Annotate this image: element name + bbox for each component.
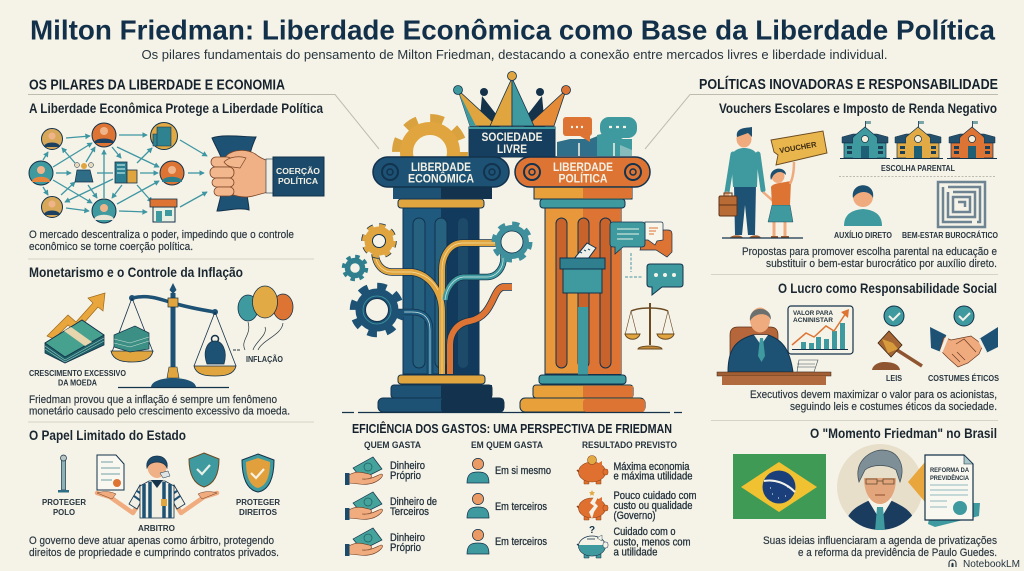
column headers — [364, 440, 677, 451]
panel: eficiência dos gastos — [345, 421, 697, 558]
icon: speech bubbles and crowd — [557, 117, 637, 156]
text block: friedman — [29, 394, 290, 418]
column: resultado previsto: Cuidado com o — [614, 526, 676, 538]
chart board: valor para acionistas — [788, 306, 853, 354]
icon: shield check teal — [189, 453, 219, 487]
text block: suas ideias: Suas ideias influenciaram a agenda de privatizações — [763, 535, 997, 547]
icon: empty piggy bank: ? — [589, 525, 595, 536]
icon: direct aid person — [844, 185, 882, 226]
pillar: liberdade política — [515, 157, 650, 412]
icon: gear teal large — [494, 224, 530, 260]
column: quem gasta: Dinheiro — [390, 532, 425, 544]
column: resultado previsto: Máxima economia — [614, 461, 690, 473]
column headers: EM QUEM GASTA — [471, 440, 543, 451]
icon: hand with money 3 — [345, 528, 382, 556]
column: resultado previsto: custo ou qualidade — [614, 500, 693, 512]
text block: propostas: substituir o bem-estar burocrático por auxílio direto. — [766, 258, 997, 270]
label: liberdade econômica — [408, 162, 474, 186]
label: crescimento excessivo: CRESCIMENTO EXCESSIVO — [29, 368, 126, 378]
text block: propostas — [742, 246, 997, 270]
banner: sociedade livre: LIVRE — [497, 144, 527, 156]
text block: executivos: seguindo leis e costumes éticos da sociedade. — [790, 401, 997, 413]
column: em quem gasta: Em si mesmo — [495, 465, 551, 477]
heading: liberdade econômica: A Liberdade Econômica Protege a Liberdade Política — [29, 101, 323, 116]
banner: sociedade livre: SOCIEDADE — [482, 132, 543, 144]
icon: fist crushing bag — [210, 136, 324, 211]
column: resultado previsto: custo, menos com — [614, 536, 691, 548]
icon: crown — [454, 72, 570, 127]
column: quem gasta: Terceiros — [390, 506, 429, 518]
text block: governo — [29, 535, 279, 559]
panel: políticas inovadoras — [645, 76, 999, 559]
banner: sociedade livre — [469, 127, 555, 157]
icon: meeting group — [74, 162, 94, 182]
column: em quem gasta: Em terceiros — [495, 501, 547, 513]
icon: full piggy bank — [577, 456, 608, 484]
icon: portrait of Paulo Guedes — [837, 444, 923, 531]
ground line — [342, 412, 682, 414]
label: inflação: INFLAÇÃO — [246, 354, 283, 364]
icon: balloons — [233, 286, 293, 350]
label: árbitro: ARBITRO — [138, 523, 175, 533]
watermark: NotebookLM: NotebookLM — [963, 558, 1020, 570]
label: proteger polo — [42, 497, 87, 517]
label: proteger direitos — [236, 497, 281, 517]
labels: leis and costumes éticos — [886, 373, 999, 383]
labels: leis and costumes éticos: COSTUMES ÉTICOS — [928, 373, 999, 383]
label: crescimento excessivo: DA MOEDA — [58, 378, 97, 388]
column headers: RESULTADO PREVISTO — [582, 440, 677, 451]
icon: brazil flag — [733, 454, 826, 519]
label: liberdade política: POLÍTICA — [558, 172, 608, 186]
column: quem gasta: Próprio — [390, 470, 421, 482]
label: proteger direitos: PROTEGER — [236, 497, 281, 507]
label: escolha parental: ESCOLHA PARENTAL — [881, 163, 955, 173]
pillar: liberdade econômica — [373, 157, 509, 412]
label: liberdade econômica: ECONÔMICA — [408, 172, 474, 186]
subtitle: Os pilares fundamentais do pensamento de Milton Friedman, destacando a conexão entre mercados livres e liberdade individual. — [142, 47, 888, 62]
labels: auxílio and bem-estar: AUXÍLIO DIRETO — [834, 230, 892, 240]
heading: papel limitado: O Papel Limitado do Estado — [29, 428, 186, 443]
labels: auxílio and bem-estar: BEM-ESTAR BUROCRÁTICO — [902, 230, 998, 240]
section heading: pilares: OS PILARES DA LIBERDADE E ECONOMIA — [29, 78, 285, 94]
text block: executivos: Executivos devem maximizar o valor para os acionistas, — [750, 389, 997, 401]
icon: fist crushing bag: POLÍTICA — [278, 176, 318, 186]
icon: hand with money 2 — [345, 492, 382, 520]
heading: eficiência: EFICIÊNCIA DOS GASTOS: UMA PERSPECTIVA DE FRIEDMAN — [352, 421, 672, 436]
column: quem gasta: Próprio — [390, 542, 421, 554]
icon: voucher: VOUCHER — [779, 140, 818, 155]
network diagram — [29, 122, 207, 223]
icon: referee — [97, 456, 217, 518]
label: liberdade política: LIBERDADE — [553, 162, 613, 174]
chart board: valor para acionistas: VALOR PARA — [793, 310, 833, 317]
icon: building — [153, 127, 171, 146]
label: liberdade econômica: LIBERDADE — [411, 162, 471, 174]
icon: reforma da previdência document: REFORMA DA — [930, 467, 969, 474]
labels: leis and costumes éticos: LEIS — [886, 373, 902, 383]
text block: friedman: monetário causado pelo crescimento excessivo da moeda. — [29, 406, 290, 418]
icon: rising arrow — [47, 293, 105, 339]
column: resultado previsto: e máxima utilidade — [614, 470, 693, 482]
labels: auxílio and bem-estar — [834, 230, 998, 240]
panel: os pilares da liberdade e economia — [28, 78, 379, 559]
icon: store — [150, 199, 177, 222]
icon: shield check gold — [242, 454, 274, 492]
icon: small scales — [625, 303, 674, 349]
column: resultado previsto: a utilidade — [614, 546, 658, 558]
title: Milton Friedman: Liberdade Econômica como Base da Liberdade Política — [30, 14, 995, 46]
icon: post — [58, 455, 69, 492]
text block: executivos — [750, 389, 997, 413]
node: people — [29, 122, 184, 223]
column: resultado previsto: Pouco cuidado com — [614, 490, 697, 502]
text block: friedman: Friedman provou que a inflação é sempre um fenômeno — [29, 394, 277, 406]
column headers: QUEM GASTA — [364, 440, 421, 451]
column: em quem gasta: Em terceiros — [495, 536, 547, 548]
icon: hand with money — [345, 457, 382, 485]
label: coerção política: COERÇÃO — [276, 166, 320, 176]
chart board: valor para acionistas: ACNINISTAR — [793, 317, 833, 324]
illustration: executive at desk — [717, 308, 831, 385]
icon: ballot box — [560, 243, 605, 293]
text block: mercado: econômico se torne coerção política. — [29, 241, 193, 253]
label: crescimento excessivo — [29, 368, 126, 388]
column: resultado previsto — [577, 456, 697, 558]
panel: central pillars — [342, 72, 683, 412]
heading: momento friedman: O "Momento Friedman" no Brasil — [810, 426, 997, 441]
icon: broken piggy bank — [577, 490, 608, 520]
icons: schools — [840, 121, 997, 158]
text block: mercado: O mercado descentraliza o poder, impedindo que o controle — [29, 229, 294, 241]
label: proteger direitos: DIREITOS — [239, 507, 277, 517]
column: quem gasta: Dinheiro — [390, 460, 425, 472]
icon: gear gold small — [364, 226, 394, 256]
label: proteger polo: PROTEGER — [42, 497, 87, 507]
icon: maze — [938, 182, 985, 227]
column: em quem gasta — [467, 458, 551, 554]
icon: reforma da previdência document — [908, 455, 980, 527]
text block: suas ideias — [763, 535, 997, 559]
illustration: father and child — [719, 127, 827, 238]
icon: check over gavel — [872, 306, 922, 370]
icon: reforma da previdência document: PREVIDÊNCIA — [930, 473, 969, 482]
icon: center building — [115, 162, 137, 183]
pipes and gears — [344, 224, 530, 374]
text block: suas ideias: e a reforma da previdência de Paulo Guedes. — [798, 547, 997, 559]
icon: document — [97, 455, 124, 490]
icon: money stack — [45, 320, 104, 363]
icon: gear gold — [392, 114, 468, 156]
icon: check over handshake — [930, 306, 998, 367]
column: quem gasta — [345, 457, 437, 556]
label: liberdade política — [553, 162, 613, 186]
icon: gear navy — [353, 286, 401, 334]
text block: mercado — [29, 229, 294, 253]
icon: balance scale — [111, 283, 236, 388]
column: quem gasta: Dinheiro de — [390, 496, 437, 508]
column: resultado previsto: (Governo) — [614, 510, 656, 522]
text block: governo: O governo deve atuar apenas como árbitro, protegendo — [29, 535, 274, 547]
icon: chat bubbles — [610, 222, 683, 295]
heading: monetarismo: Monetarismo e o Controle da Inflação — [29, 265, 243, 280]
text block: governo: direitos de propriedade e cumprindo contratos privados. — [29, 547, 279, 559]
icon: gear teal small — [344, 256, 366, 280]
label: proteger polo: POLO — [53, 507, 75, 517]
